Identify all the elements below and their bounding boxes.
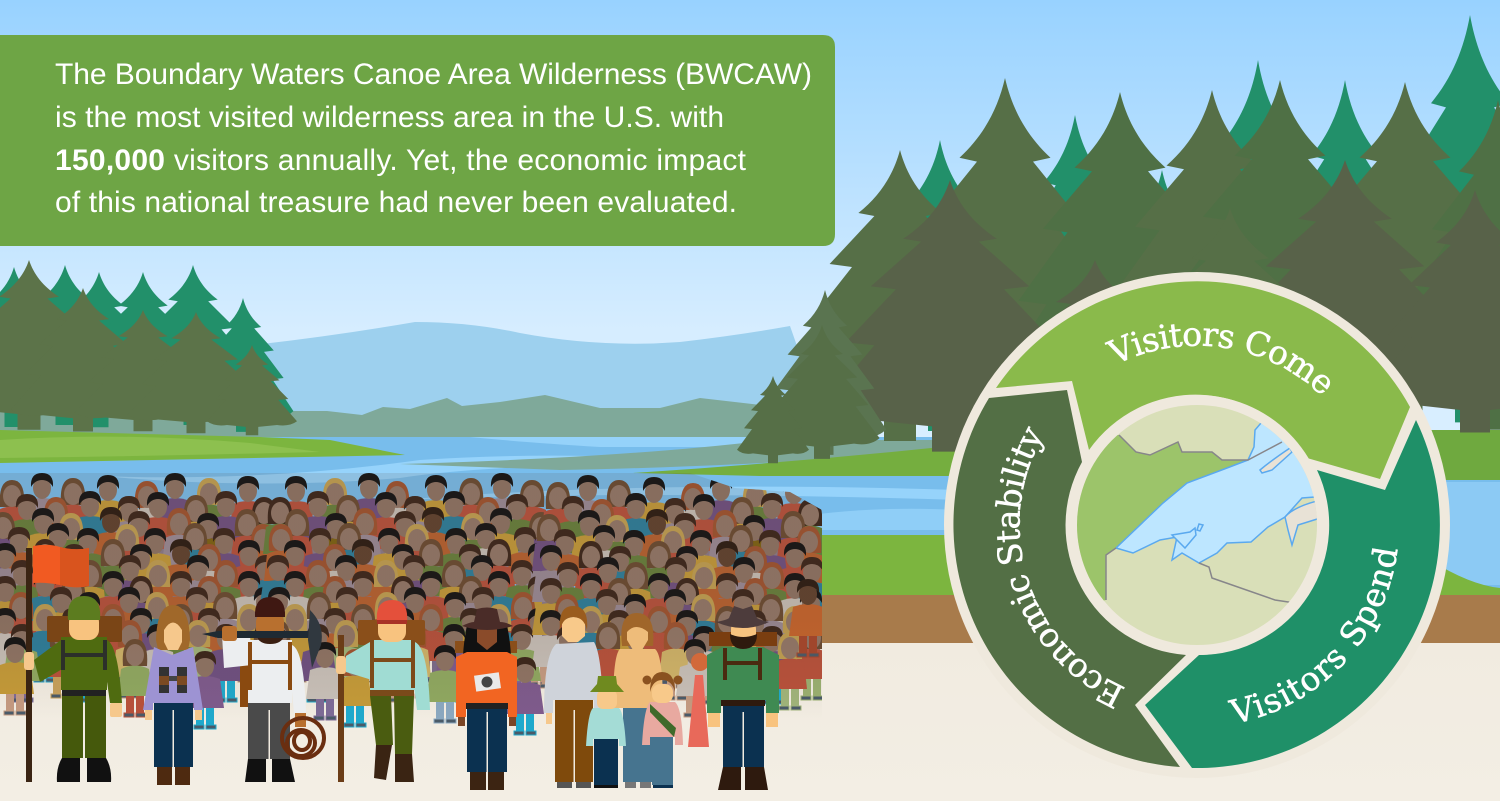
map of Lake Superior region [1077, 395, 1317, 655]
background child in red dress [688, 653, 709, 747]
lake [0, 437, 1500, 602]
intro text panel: The Boundary Waters Canoe Area Wilderness (BWCAW) [55, 58, 812, 91]
intro text panel: is the most visited wilderness area in the U.S. with [55, 101, 724, 134]
cycle diagram [944, 272, 1450, 768]
visitor: woman with camera [455, 608, 517, 790]
arrow: visitors come [996, 281, 1410, 479]
far shores and meadow [0, 430, 1500, 801]
sky background [0, 0, 1500, 440]
visitor: ranger with flag [24, 545, 122, 782]
arrow: economic stability: Economic Stability [994, 426, 1125, 710]
intro text panel: 150,000 visitors annually. Yet, the economic impact [55, 144, 747, 177]
visitor: hiker with red cap [336, 600, 430, 782]
left tree group [0, 260, 297, 435]
arrow: visitors spend [1145, 420, 1440, 768]
visitor: bearded man with hat [707, 606, 779, 790]
visitor: family with two children [544, 606, 683, 788]
intro text panel [0, 35, 835, 246]
arrow: economic stability [953, 390, 1186, 767]
visitor: birdwatcher woman [143, 605, 203, 785]
intro text panel: of this national treasure had never been evaluated. [55, 186, 737, 219]
arrow: visitors spend: Visitors Spend [1228, 548, 1398, 722]
arrow: visitors come: Visitors Come [1104, 324, 1330, 394]
distant mountains [0, 322, 830, 445]
crowd of visitors [0, 470, 831, 735]
right forest [737, 15, 1500, 463]
visitor: climber with pickaxe and rope [202, 597, 324, 782]
